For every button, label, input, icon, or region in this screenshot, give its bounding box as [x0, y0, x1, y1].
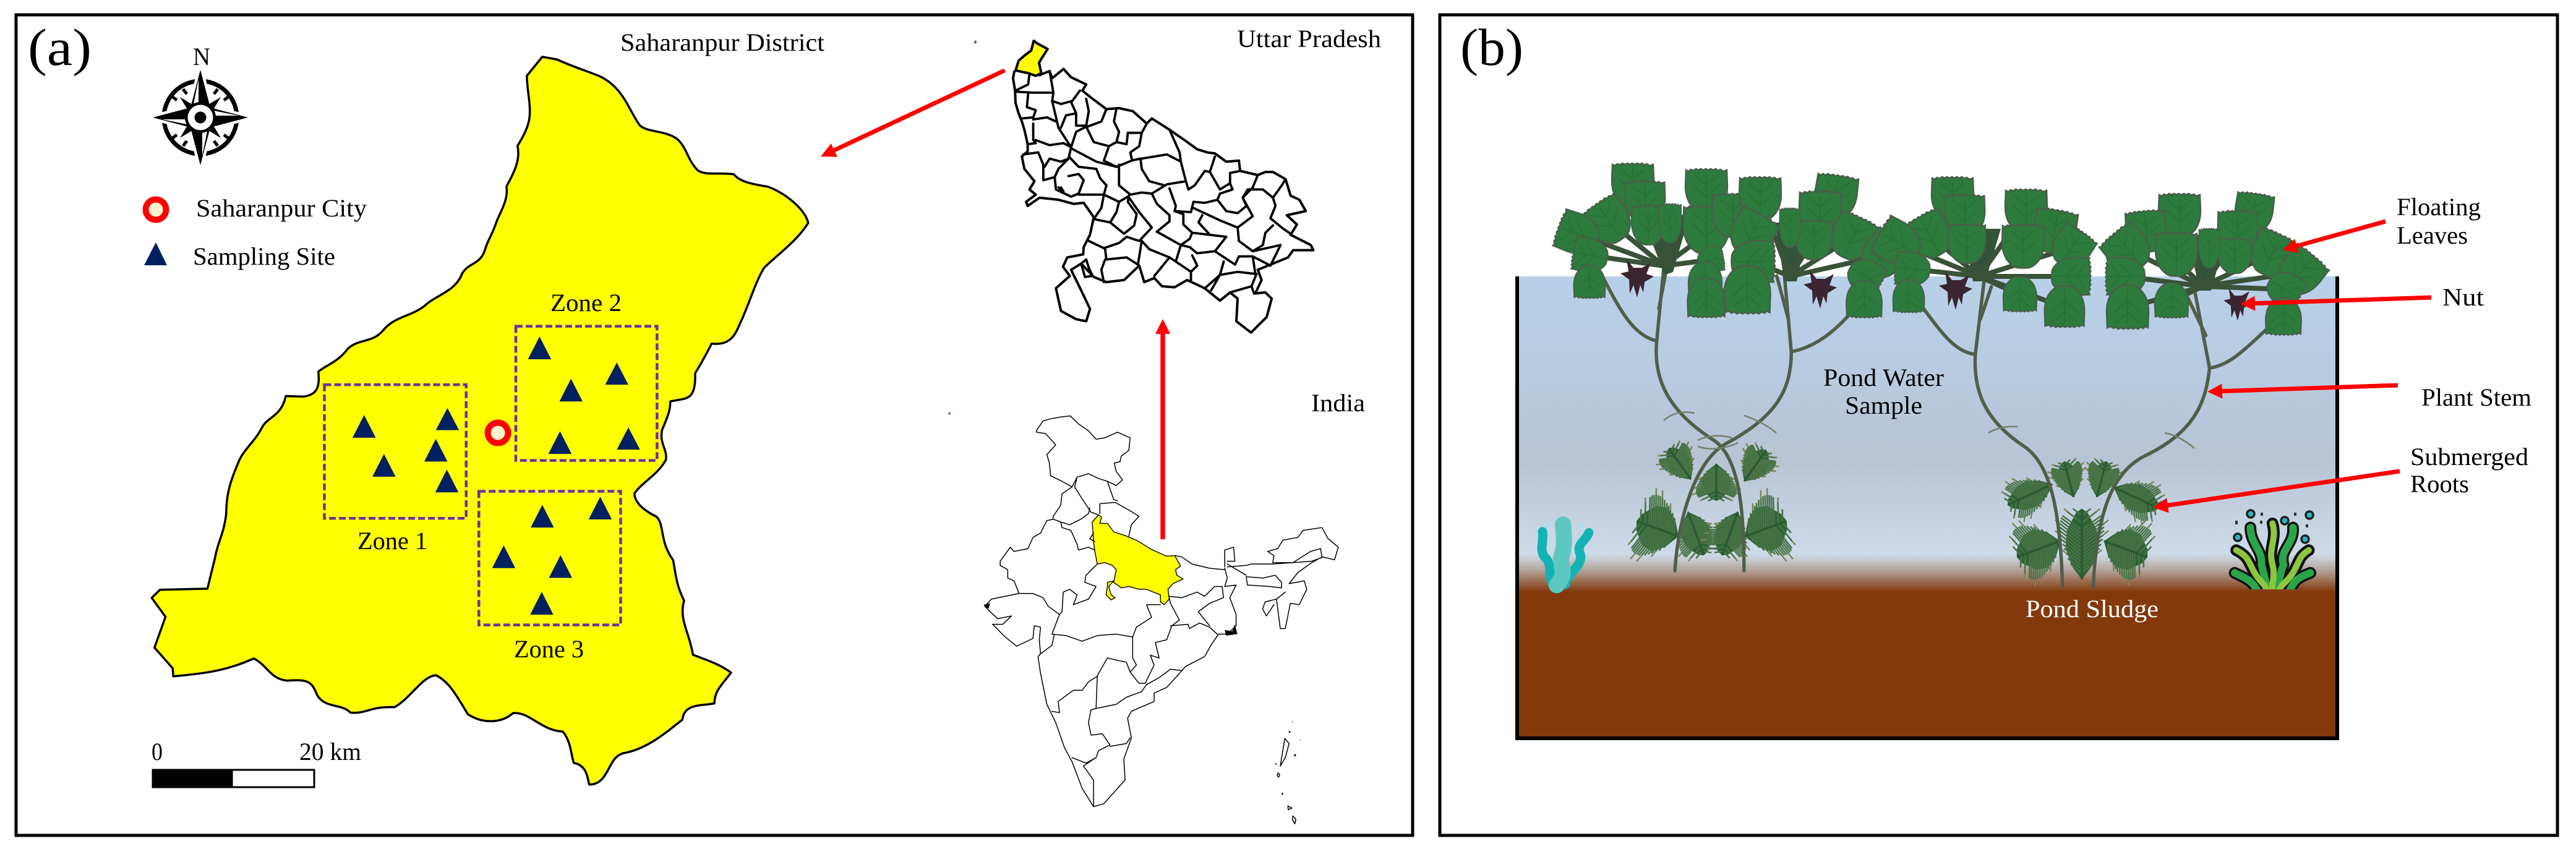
label: Submerged Roots — [2410, 443, 2528, 498]
stem root hairs — [1664, 412, 2194, 449]
district boundaries — [1016, 71, 1291, 294]
label: Pond Water Sample: Pond Water — [1823, 364, 1944, 391]
scale bar: 20 km — [299, 738, 361, 766]
label: Pond Water Sample: Sample — [1845, 391, 1922, 419]
petioles and crown bases — [1577, 186, 2301, 308]
scale bar: 0 — [152, 738, 163, 766]
panel b: pond schematic — [1440, 15, 2557, 835]
Uttar Pradesh highlight — [1092, 515, 1183, 605]
floating leaves — [1552, 163, 2330, 335]
pond cross-section — [1517, 276, 2337, 738]
north arrow compass — [153, 43, 248, 165]
label: Floating Leaves — [2397, 193, 2481, 249]
label: Floating Leaves: Floating — [2397, 193, 2481, 221]
state outline — [1013, 69, 1313, 333]
submerged roots — [1624, 437, 2168, 589]
label: Floating Leaves: Leaves — [2397, 221, 2468, 249]
panel label a: (a) — [28, 19, 92, 77]
label: Pond Water Sample — [1823, 364, 1944, 419]
label: Zone 3: Zone 3 — [514, 635, 584, 663]
district outline — [152, 57, 808, 785]
teal seaweed icon — [1542, 524, 1589, 585]
panel label b: (b) — [1460, 19, 1523, 77]
heading: India: India — [1311, 389, 1365, 417]
label: Nut: Nut — [2442, 283, 2484, 311]
Saharanpur highlight — [1016, 41, 1048, 76]
label: Zone 2: Zone 2 — [550, 289, 622, 317]
arrow: floating leaves — [2290, 221, 2386, 248]
label: Submerged Roots: Roots — [2410, 470, 2469, 498]
map: India states — [984, 416, 1338, 824]
legend: site symbol — [144, 242, 167, 265]
arrow: nut — [2248, 297, 2431, 304]
legend: city symbol — [146, 199, 166, 220]
legend — [144, 194, 367, 270]
trapa nuts — [1620, 259, 2252, 321]
green seaweed icon — [2234, 510, 2313, 594]
legend: city label: Saharanpur City — [196, 194, 367, 222]
label: Plant Stem: Plant Stem — [2421, 383, 2531, 411]
label: Zone 1: Zone 1 — [357, 527, 427, 555]
dense coast and islands — [984, 604, 1301, 795]
plant stems — [1602, 265, 2279, 587]
arrow: submerged roots — [2160, 471, 2400, 506]
heading: Saharanpur District: Saharanpur District — [620, 28, 824, 56]
heading: Uttar Pradesh: Uttar Pradesh — [1237, 25, 1381, 53]
arrow: plant stem — [2215, 385, 2398, 391]
map: Uttar Pradesh districts — [1013, 41, 1313, 333]
north arrow compass: N — [193, 43, 210, 70]
speck marks — [948, 40, 977, 414]
map: Saharanpur District — [152, 57, 808, 785]
label: Pond Sludge: Pond Sludge — [2026, 595, 2159, 623]
scale bar — [152, 738, 361, 787]
sampling site triangles — [353, 336, 640, 615]
zone boxes — [324, 326, 657, 625]
label: Submerged Roots: Submerged — [2410, 443, 2528, 471]
state boundaries — [985, 416, 1338, 824]
arrow: Uttar Pradesh to Saharanpur — [828, 71, 1003, 153]
panel a: study area map — [16, 15, 1413, 835]
Saharanpur city marker — [487, 423, 508, 443]
legend: site label: Sampling Site — [193, 242, 335, 270]
arrow: India to Uttar Pradesh — [1160, 326, 1165, 539]
